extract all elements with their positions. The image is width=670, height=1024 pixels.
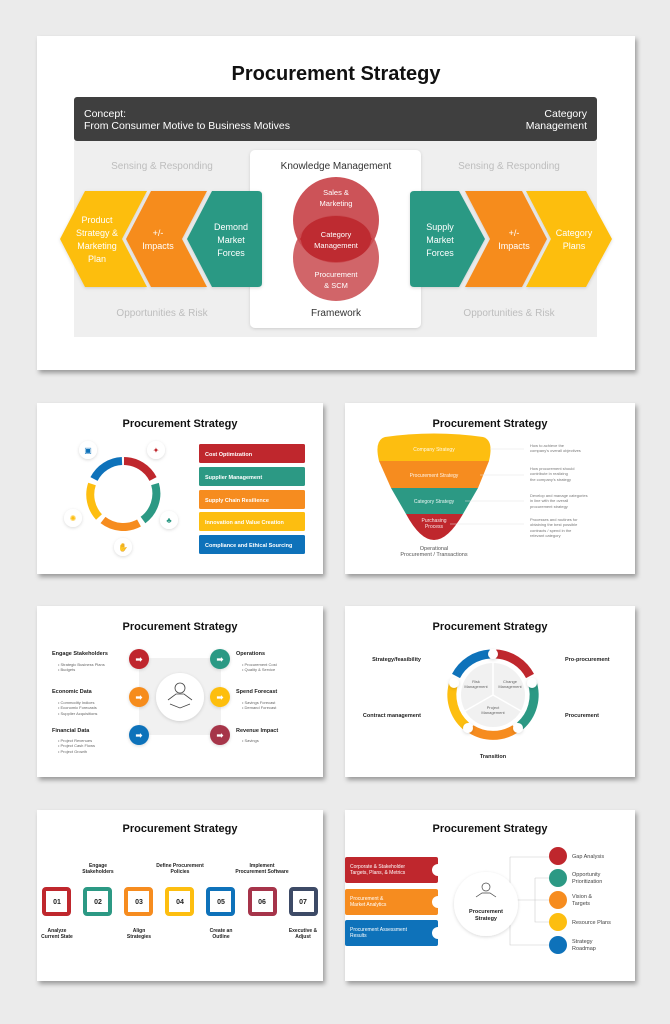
panel: slide 5 cycle: Project <box>487 705 500 710</box>
panel: slide 2 ring + bars: ▣ <box>84 446 92 455</box>
panel: main slide: Demond <box>214 222 248 232</box>
panel: slide 6 steps: 04 <box>176 899 184 906</box>
right texts: • Procurement Cost <box>242 662 278 667</box>
panel: slide 4 inputs/outputs: ➡ <box>217 693 224 702</box>
right icon list: Resource Plans <box>572 920 611 926</box>
right icon list: Strategy <box>572 939 593 945</box>
panel: slide 6 steps: Procurement Software <box>235 869 289 875</box>
left texts <box>52 651 108 754</box>
left texts: • Project Revenues <box>58 738 92 743</box>
panel: slide 5 cycle: Procurement <box>565 713 599 719</box>
right icon list: Prioritization <box>572 879 602 885</box>
title: Procurement Strategy <box>123 418 238 430</box>
right icon list: Opportunity <box>572 872 601 878</box>
left bars: Market Analytics <box>350 902 387 908</box>
right texts: • Demand Forecast <box>242 705 277 710</box>
panel: slide 5 cycle: Change <box>503 679 518 684</box>
panel: slide 7 inputs to outputs <box>345 810 635 981</box>
left bars <box>345 857 444 946</box>
panel: slide 5 cycle: Contract management <box>363 713 421 719</box>
panel: slide 6 steps: Outline <box>212 934 230 940</box>
panel: main slide: Category <box>556 228 593 238</box>
panel: slide 6 steps: Current State <box>41 934 73 940</box>
left texts: • Supplier Acquisitions <box>58 711 97 716</box>
center box: knowledge management: Marketing <box>320 199 352 208</box>
panel: main slide: Product <box>81 215 113 225</box>
left labels: Opportunities & Risk <box>116 308 209 319</box>
concept bar: Concept: <box>84 108 126 120</box>
bars: Supplier Management <box>205 475 262 481</box>
descriptions: the company's strategy <box>530 477 571 482</box>
center circle: Procurement <box>469 909 503 915</box>
step boxes <box>44 889 316 914</box>
bars: Cost Optimization <box>205 452 253 458</box>
panel: slide 6 steps: Define Procurement <box>156 863 204 869</box>
descriptions: relevant category <box>530 533 561 538</box>
funnel: Category Strategy <box>414 499 455 505</box>
center box: knowledge management <box>250 150 421 328</box>
right icon list: Roadmap <box>572 946 596 952</box>
right texts: Revenue Impact <box>236 728 278 734</box>
panel: main slide: Strategy & <box>76 228 118 238</box>
left texts: • Strategic Business Plans <box>58 662 105 667</box>
panel: main slide: Marketing <box>77 241 117 251</box>
descriptions: obtaining the best possible <box>530 522 578 527</box>
center box: knowledge management: Sales & <box>323 188 349 197</box>
connectors <box>510 857 549 945</box>
panel: main slide: +/- <box>509 228 519 238</box>
bars: Innovation and Value Creation <box>205 520 284 526</box>
left texts: Financial Data <box>52 728 90 734</box>
panel: main slide <box>37 36 635 370</box>
right texts: • Savings Forecast <box>242 700 276 705</box>
panel: slide 4 inputs/outputs: ➡ <box>217 655 224 664</box>
right chevrons <box>410 191 612 287</box>
left labels: Sensing & Responding <box>458 161 560 172</box>
cycle ring <box>452 654 534 735</box>
left labels: Opportunities & Risk <box>463 308 556 319</box>
right icon list <box>549 847 611 954</box>
panel: slide 6 steps: Policies <box>171 869 190 875</box>
left texts: • Economic Forecasts <box>58 705 97 710</box>
funnel: Process <box>425 524 444 530</box>
descriptions: company's overall objectives <box>530 448 581 453</box>
left texts: • Project Cash Flows <box>58 743 95 748</box>
descriptions: Processes and routines for <box>530 517 578 522</box>
funnel: Procurement Strategy <box>410 473 459 479</box>
right texts <box>236 651 278 743</box>
panel: slide 6 steps: 06 <box>258 899 266 906</box>
concept bar: Management <box>526 120 587 132</box>
panel: slide 6 steps <box>37 810 323 981</box>
panel: slide 6 steps: Create an <box>210 928 232 934</box>
left bars: Targets, Plans, & Metrics <box>350 870 406 876</box>
left bars: Procurement & <box>350 896 384 902</box>
panel: slide 6 steps: Stakeholders <box>82 869 114 875</box>
panel: slide 2 ring + bars: ✋ <box>118 542 128 552</box>
panel: slide 6 steps: Implement <box>249 863 275 869</box>
descriptions: Develop and manage categories <box>530 493 588 498</box>
left texts: • Commodity Indices <box>58 700 95 705</box>
left bars: Procurement Assessment <box>350 927 408 933</box>
panel: slide 3 funnel <box>345 403 635 574</box>
descriptions <box>450 443 588 538</box>
left texts: • Budgets <box>58 667 75 672</box>
left labels <box>111 161 560 319</box>
title: Procurement Strategy <box>433 823 548 835</box>
panel: slide 5 cycle: Pro-procurement <box>565 657 610 663</box>
panel: main slide: Market <box>217 235 245 245</box>
left texts: Engage Stakeholders <box>52 651 108 657</box>
panel: slide 5 cycle <box>345 606 635 777</box>
concept bar: From Consumer Motive to Business Motives <box>84 120 290 132</box>
panel: slide 5 cycle: Strategy/feasibility <box>372 657 422 663</box>
panel: slide 2 ring + bars: ♣ <box>166 516 172 525</box>
panel: slide 5 cycle: Management <box>481 710 506 715</box>
panel: slide 2 ring + bars <box>37 403 323 574</box>
right texts: Spend Forecast <box>236 689 277 695</box>
descriptions: How procurement should <box>530 466 574 471</box>
center box: knowledge management: Category <box>321 230 351 239</box>
panel: slide 4 inputs/outputs: ➡ <box>217 731 224 740</box>
title: Procurement Strategy <box>123 621 238 633</box>
concept bar: Category <box>544 108 588 120</box>
right texts: • Savings <box>242 738 259 743</box>
right texts: Operations <box>236 651 265 657</box>
right texts: • Quality & Service <box>242 667 276 672</box>
panel: slide 6 steps: Strategies <box>127 934 151 940</box>
funnel <box>377 434 491 558</box>
funnel: Procurement / Transactions <box>400 552 468 558</box>
panel: main slide: +/- <box>153 228 163 238</box>
panel: slide 2 ring + bars: ✺ <box>70 514 77 523</box>
funnel: Purchasing <box>421 518 447 524</box>
panel: slide 6 steps: Analyze <box>48 928 67 934</box>
panel: slide 5 cycle: Transition <box>480 754 507 760</box>
panel: slide 6 steps: Adjust <box>295 934 311 940</box>
bars: Supply Chain Resilience <box>205 498 269 504</box>
descriptions: contribute in realizing <box>530 471 568 476</box>
panel: slide 5 cycle: Risk <box>472 679 480 684</box>
ring chart <box>90 461 156 527</box>
panel: slide 6 steps: 02 <box>94 899 102 906</box>
center circle <box>454 872 518 936</box>
left bars: Corporate & Stakeholder <box>350 864 405 870</box>
descriptions: contracts / spend in the <box>530 528 572 533</box>
descriptions: in line with the overall <box>530 498 568 503</box>
panel: main slide: Forces <box>426 248 454 258</box>
title: Procurement Strategy <box>433 621 548 633</box>
left texts: Economic Data <box>52 689 93 695</box>
center box: knowledge management: Procurement <box>315 270 358 279</box>
panel: slide 4 inputs/outputs <box>37 606 323 777</box>
left texts: • Project Growth <box>58 749 87 754</box>
panel: slide 4 inputs/outputs: ➡ <box>136 693 143 702</box>
panel: slide 6 steps: 07 <box>299 899 307 906</box>
title: Procurement Strategy <box>123 823 238 835</box>
descriptions: How to achieve the <box>530 443 565 448</box>
panel: slide 6 steps: 05 <box>217 899 225 906</box>
right icon list: Gap Analysis <box>572 854 604 860</box>
icons <box>64 441 178 556</box>
panel: slide 6 steps: 01 <box>53 899 61 906</box>
descriptions: procurement strategy <box>530 504 568 509</box>
panel: main slide: Impacts <box>142 241 174 251</box>
panel: main slide: Plans <box>563 241 586 251</box>
funnel: Operational <box>420 546 448 552</box>
center handshake icon <box>156 673 204 721</box>
panel: slide 6 steps: Executive & <box>289 928 318 934</box>
left bars: Results <box>350 933 367 939</box>
panel: slide 5 cycle: Management <box>464 684 489 689</box>
panel: main slide: Market <box>426 235 454 245</box>
panel: slide 4 inputs/outputs: ➡ <box>136 731 143 740</box>
panel: slide 6 steps: 03 <box>135 899 143 906</box>
panel: slide 6 steps: Engage <box>89 863 107 869</box>
panel: slide 6 steps: Align <box>133 928 145 934</box>
center circle: Strategy <box>475 916 498 922</box>
bars: Compliance and Ethical Sourcing <box>205 543 292 549</box>
right icon list: Vision & <box>572 894 592 900</box>
panel: slide 4 inputs/outputs: ➡ <box>136 655 143 664</box>
center box: knowledge management: & SCM <box>324 281 348 290</box>
bars <box>199 444 305 554</box>
left chevrons <box>60 191 262 287</box>
left labels: Sensing & Responding <box>111 161 213 172</box>
center box: knowledge management: Framework <box>311 308 362 319</box>
center box: knowledge management: Management <box>314 241 359 250</box>
title: Procurement Strategy <box>433 418 548 430</box>
panel: slide 2 ring + bars: ✦ <box>153 446 160 455</box>
center box: knowledge management: Knowledge Management <box>281 161 392 172</box>
concept bar <box>74 97 597 141</box>
arrow circles <box>129 649 230 745</box>
panel: main slide: Forces <box>217 248 245 258</box>
panel: main slide: Supply <box>426 222 454 232</box>
funnel: Company Strategy <box>413 447 455 453</box>
panel: main slide: Impacts <box>498 241 530 251</box>
panel: main slide: Plan <box>88 254 106 264</box>
gray backdrop <box>74 141 597 337</box>
panel: slide 5 cycle: Management <box>498 684 523 689</box>
title: Procurement Strategy <box>232 63 441 85</box>
right icon list: Targets <box>572 901 590 907</box>
